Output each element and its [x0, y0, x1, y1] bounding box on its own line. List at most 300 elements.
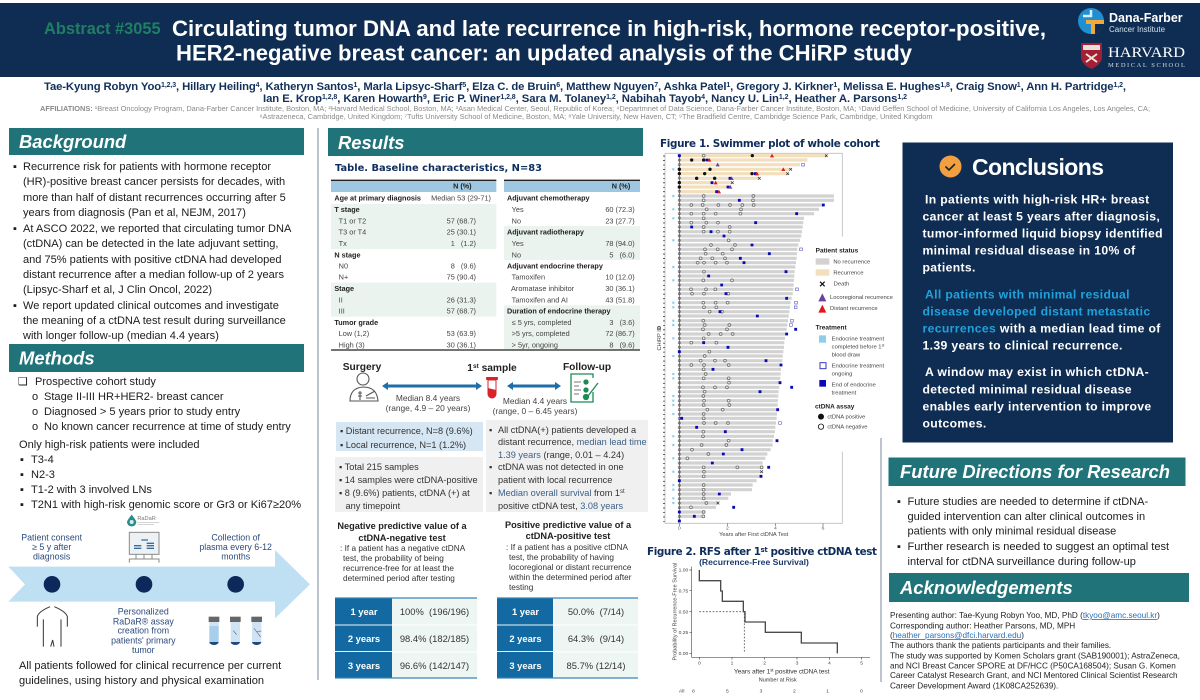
methods text: Diagnosed > 5 years prior to study entry: [44, 406, 241, 418]
heading: conclusions: Conclusions: [972, 154, 1104, 180]
logo: Dana-Farber: Cancer Institute: [1109, 25, 1166, 34]
authors: 1,2: [606, 94, 616, 101]
table: right column: 8 (9.6): [609, 340, 635, 349]
logo: Harvard Medical School: [1081, 43, 1185, 69]
future directions text: Future studies are needed to determine if ctDNA-: [908, 496, 1149, 508]
axis labels: 2: [726, 525, 729, 531]
table: positive predictive value: 64.3% (9/14): [568, 633, 624, 644]
positive predictive value text: test, the probability of having: [509, 553, 614, 562]
authors: , Melissa E. Hughes: [837, 81, 941, 93]
number at risk: [679, 678, 863, 694]
authors: 7: [654, 82, 658, 89]
callout: ctDNA outcomes: ▪: [489, 462, 492, 472]
authors: 1,2,8: [322, 94, 337, 101]
legend: st: [882, 344, 884, 348]
conclusion 1: minimal residual disease in 10% of: [922, 244, 1136, 258]
label: plasma collection: [199, 533, 272, 562]
table: left column: Stage: [334, 284, 354, 293]
interval labels: (range, 4.9 – 20 years): [386, 403, 471, 413]
methods text: N2-3: [31, 469, 55, 481]
table: left column: 75 (90.4): [447, 273, 476, 282]
legend: blood draw: [832, 352, 861, 358]
callout: sample counts: ▪ 8 (9.6%) patients, ctDNA (+) at: [339, 488, 470, 498]
background text: [13, 161, 292, 342]
axis labels: 1.00: [679, 568, 689, 574]
callout: ctDNA outcomes: distant recurrence, median lead time: [498, 437, 647, 447]
axis labels: positive ctDNA test: [773, 668, 830, 675]
authors: 1,2,8: [500, 94, 516, 101]
legend: End of endocrine: [832, 382, 876, 388]
arrow: median 8.4 years: [382, 382, 482, 390]
table: left column: Median 53 (29-71): [431, 194, 491, 203]
table: left column: Tx: [339, 239, 347, 248]
table: right column: 78 (94.0): [605, 239, 635, 248]
label: plasma collection: months: [221, 552, 251, 562]
affiliations: AFFILIATIONS: ¹Breast Oncology Program, Dana-Farber Cancer Institute, Boston, MA; ²Harvard Medical School, Boston, MA; ³Asan Medical Center, Seoul, Republic of Korea; ⁴Departmnet of Data Science, Dana-Farber Cancer Institute, Boston, MA; ⁵David Geffen School of Medicine, University of California Los Angeles, Los Angeles, CA;: [40, 104, 1150, 113]
label: patient consent: ≥ 5 y after: [32, 542, 71, 552]
callout: sample counts: any timepoint: [346, 501, 401, 511]
title: Circulating tumor DNA and late recurrence in high-risk, hormone receptor-positive,: [172, 16, 1046, 41]
conclusion 2: [922, 288, 1161, 352]
legend: ongoing: [832, 371, 852, 377]
negative predictive value text: determined period after testing: [343, 574, 455, 583]
baseline ctDNA column: [675, 156, 684, 522]
axis labels: 3: [796, 660, 799, 666]
legend: Distant recurrence: [830, 306, 878, 312]
legend: ctDNA negative: [827, 425, 868, 431]
label: patient consent: [21, 533, 83, 562]
axis labels: CHiRP ID: [657, 326, 663, 351]
future directions text: patients with only minimal residual disease: [908, 526, 1116, 538]
acknowledgements text: and NCI Breast Cancer SPORE at DF/HCC (P50CA168504); Susan G. Komen: [890, 662, 1176, 670]
icon: monitor: [129, 532, 159, 563]
future directions text: interval for ctDNA surveillance during follow-up: [908, 556, 1136, 568]
conclusion 3: detected minimal residual disease: [922, 382, 1132, 396]
table: positive predictive value: 50.0% (7/14): [568, 606, 624, 617]
table: left column: 53 (63.9): [447, 329, 476, 338]
background text: At ASCO 2022, we reported that circulating tumor DNA: [23, 223, 292, 235]
authors: , Karen Howarth: [337, 93, 423, 105]
table: left column: 8 (9.6): [451, 261, 476, 270]
icon: surgery patient: [350, 373, 378, 401]
authors: , Heather A. Parsons: [788, 93, 897, 105]
table: negative predictive value: 3 years: [348, 660, 380, 671]
axis labels: 0.00: [679, 651, 689, 657]
negative predictive value text: ctDNA-negative test: [358, 533, 446, 543]
axis labels: Years after 1: [734, 668, 770, 675]
distant recurrence markers: [707, 154, 785, 193]
callout: ctDNA outcomes: patient with local recurrence: [498, 475, 612, 485]
timeline: surgery to follow-up: Follow-up: [563, 362, 611, 373]
authors: 1,2: [779, 94, 789, 101]
heading: results: [328, 128, 643, 156]
table: left column: 57 (68.7): [447, 307, 476, 316]
future directions text: Further research is needed to suggest an optimal test: [908, 541, 1169, 553]
table: right column: Tamoxifen: [512, 273, 545, 282]
methods text: o: [32, 406, 38, 418]
label: personalized assay: tumor: [132, 645, 155, 655]
background text: ▪: [13, 161, 17, 173]
table: right column: >5 yrs, completed: [512, 329, 570, 338]
authors: 1: [354, 82, 358, 89]
callout: ctDNA outcomes: st: [620, 489, 625, 495]
conclusion 2: All patients with minimal residual: [925, 288, 1130, 302]
axis labels: Probability of Recurrence-Free Survival: [673, 563, 679, 660]
conclusion 1: In patients with high-risk HR+ breast: [925, 192, 1150, 206]
timeline: surgery to follow-up: sample: [479, 363, 517, 374]
methods text: ▪: [20, 499, 24, 511]
authors: 1,8: [940, 82, 950, 89]
table: right column: No: [512, 250, 521, 259]
conclusion 2: disease developed distant metastatic: [922, 304, 1150, 318]
positive predictive value text: [505, 520, 632, 592]
background text: years from diagnosis (Pan et al, NEJM, 2017): [23, 207, 246, 219]
background text: with longer follow-up (median 4.4 years): [22, 330, 219, 342]
axis labels: st: [770, 667, 774, 672]
background text: and 75% patients with positive ctDNA had developed: [23, 254, 282, 266]
axis labels: 4: [774, 525, 777, 531]
conclusion 3: enables early intervention to improve: [922, 400, 1152, 414]
table: right column: Aromatase inhibitor: [511, 284, 575, 293]
icon: RaDaR logo: [127, 515, 159, 526]
table: negative predictive value: 2 years: [348, 633, 380, 644]
icon: blood tube: [486, 377, 498, 398]
heading: acknowledgements: Acknowledgements: [899, 577, 1073, 598]
table: right column: Yes: [512, 205, 524, 214]
figure 2 title: (Recurrence-Free Survival): [699, 557, 809, 567]
table: left column: T stage: [334, 205, 360, 214]
methods text: Stage II-III HR+HER2- breast cancer: [44, 391, 224, 403]
authors: 4: [701, 94, 705, 101]
no-recurrence bars: [679, 196, 834, 521]
icon: patient torso: [37, 607, 67, 647]
acknowledgements text: Career Catalyst Research Grant, and NCI Mentored Clinical Scientist Research: [890, 671, 1178, 680]
number at risk: 0: [860, 688, 863, 694]
panel: conclusions: [902, 142, 1173, 442]
callout: ctDNA outcomes: [486, 420, 648, 512]
authors: 1,2,3: [161, 82, 176, 89]
table: negative predictive value: 100% (196/196): [400, 606, 469, 617]
baseline characteristics table: N (%): [453, 182, 472, 191]
background text: the meaning of a ctDNA test result during surveillance: [23, 315, 286, 327]
locoregional recurrence markers: [716, 163, 734, 189]
figure 2 title: [647, 546, 877, 567]
callout: recurrence counts: ▪ Local recurrence, N=1 (1.2%): [340, 440, 466, 450]
table: right column: 30 (36.1): [605, 284, 635, 293]
methods text: T1-2 with 3 involved LNs: [31, 484, 152, 496]
death markers: [717, 154, 828, 504]
acknowledgements text: Career Development Award (1K08CA252639).: [890, 682, 1058, 690]
negative predictive value text: recurrence-free for at least the: [343, 564, 454, 573]
legend: Death: [834, 282, 849, 288]
follow-up note: guidelines, using history and physical examination: [19, 675, 264, 687]
table: right column: 10 (12.0): [605, 273, 635, 282]
arrow: median 4.4 years: [507, 382, 561, 390]
table: left column: 30 (36.1): [447, 340, 476, 349]
background text: We report updated clinical outcomes and investigate: [23, 300, 279, 312]
legend: ctDNA assay: [815, 404, 855, 411]
table: right column: Adjuvant endocrine therapy: [507, 261, 603, 270]
logo: Dana-Farber: Dana-Farber: [1109, 11, 1183, 25]
table: left column: Age at primary diagnosis: [334, 194, 421, 203]
table: left column: 26 (31.3): [447, 295, 476, 304]
authors: 1: [833, 82, 837, 89]
panel: results: [328, 128, 648, 678]
heading: acknowledgements: [889, 573, 1189, 602]
number at risk: All: [679, 688, 684, 694]
callout: ctDNA outcomes: ctDNA was not detected in one: [498, 462, 624, 472]
figure 2 title: Figure 2. RFS after 1: [647, 546, 761, 558]
methods text: o: [32, 391, 38, 403]
number at risk: Number at Risk: [759, 678, 797, 684]
table: left column: III: [339, 307, 345, 316]
acknowledgements text: (heather_parsons@dfci.harvard.edu): [890, 631, 1024, 640]
authors: ,: [1123, 81, 1126, 93]
acknowledgements text: [890, 611, 1180, 690]
ctDNA positive markers: [679, 156, 752, 187]
table: right column: Duration of endocrine therapy: [507, 307, 611, 316]
table: left column: [334, 194, 491, 349]
acknowledgements text: The authors thank the patients participants and their families.: [890, 641, 1111, 650]
methods text: ▪: [20, 469, 24, 481]
panel: acknowledgements: [889, 573, 1189, 690]
legend: Endocrine treatment: [832, 336, 885, 342]
conclusion 2: 1.39 years to clinical recurrence.: [922, 338, 1123, 352]
axis labels: 0.25: [679, 630, 689, 636]
acknowledgements text: Presenting author: Tae-Kyung Robyn Yoo, MD, PhD (tkyoo@amc.seoul.kr): [890, 611, 1160, 620]
table: positive predictive value: [497, 598, 638, 678]
label: personalized assay: RaDaR® assay: [113, 616, 174, 626]
positive predictive value text: within the determined period after: [508, 573, 632, 582]
affiliations: [40, 104, 1150, 121]
chart: swimmer plot: [657, 153, 893, 538]
legend: Locoregional recurrence: [830, 295, 893, 301]
authors: 9: [423, 94, 427, 101]
conclusion 2: recurrences with a median lead time of: [922, 322, 1161, 336]
axis labels: 1: [731, 660, 734, 666]
axis labels: 4: [828, 660, 831, 666]
table: positive predictive value: 3 years: [509, 660, 542, 671]
label: personalized assay: [111, 607, 176, 655]
table title: Table. Baseline characteristics, N=83: [335, 163, 542, 174]
timeline: surgery to follow-up: [343, 362, 611, 416]
table: left column: N stage: [334, 250, 361, 259]
background text: (HR)-positive breast cancer persists for decades, with: [23, 176, 285, 188]
legend: completed before 1: [832, 345, 882, 351]
title: HER2-negative breast cancer: an updated analysis of the CHiRP study: [176, 40, 912, 66]
legend: Treatment: [816, 324, 847, 331]
authors: Tae-Kyung Robyn Yoo: [44, 81, 161, 93]
methods text: [18, 375, 301, 511]
authors: , Ashka Patel: [658, 81, 727, 93]
legend: [815, 247, 893, 431]
table: negative predictive value: 98.4% (182/185): [400, 633, 469, 644]
table: right column: 23 (27.7): [605, 216, 635, 225]
table: left column: N0: [339, 261, 348, 270]
authors: 1: [726, 82, 730, 89]
future directions text: ▪: [897, 496, 901, 508]
axis labels: 5: [860, 660, 863, 666]
logo: Harvard Medical School: HARVARD: [1108, 45, 1185, 61]
authors: , Craig Snow: [950, 81, 1017, 93]
axis labels: 0: [698, 660, 701, 666]
table: left column: T3 or T4: [339, 228, 366, 237]
heading: background: [9, 128, 304, 155]
table: left column: Tumor grade: [334, 318, 378, 327]
ctDNA negative markers: [659, 156, 762, 516]
icon: RaDaR logo: RaDaR: [137, 516, 156, 522]
table: negative predictive value: 1 year: [350, 606, 378, 617]
background text: distant recurrence after a median follow-up of 2 years: [23, 269, 284, 281]
follow-up note: All patients followed for clinical recurrence per current: [19, 660, 281, 672]
number at risk: 8: [692, 688, 695, 694]
background text: ▪: [13, 300, 17, 312]
background text: ▪: [13, 223, 17, 235]
acknowledgements text: Corresponding author: Heather Parsons, MD, MPH: [890, 622, 1075, 630]
background text: Recurrence risk for patients with hormone receptor: [23, 161, 271, 173]
table: right column: 3 (3.6): [609, 318, 635, 327]
header banner: [0, 3, 1200, 77]
heading: future directions: [888, 458, 1186, 486]
endocrine treatment completed markers: [670, 169, 677, 503]
number at risk: 3: [760, 688, 763, 694]
authors: [44, 81, 1126, 105]
panel: methods: [8, 344, 310, 687]
positive predictive value text: testing: [509, 583, 534, 592]
authors: , Gregory J. Kirkner: [730, 81, 834, 93]
callout: ctDNA outcomes: 1.39 years (range, 0.01 – 4.24): [498, 450, 624, 460]
table: positive predictive value: 2 years: [509, 633, 542, 644]
future directions text: guided intervention can alter clinical outcomes in: [908, 511, 1145, 523]
callout: ctDNA outcomes: ▪: [489, 425, 492, 435]
interval labels: Median 8.4 years: [396, 393, 460, 403]
heading: methods: Methods: [19, 348, 95, 368]
interval labels: Median 4.4 years: [503, 396, 567, 406]
negative predictive value text: test, the probability of being: [343, 554, 444, 563]
methods text: Only high-risk patients were included: [19, 439, 200, 451]
callout: recurrence counts: ▪ Distant recurrence, N=8 (9.6%): [340, 426, 473, 436]
affiliations: ⁶Astrazeneca, Cambridge, United Kingdom; ⁷Tufts University School of Medicine, Boston, MA; ⁸Yale University, New Haven, CT; ⁹The Bradfield Centre, Cambridge Science Park, Cambridge, United Kingdom: [260, 112, 932, 121]
background text: (Lipsyc-Sharf et al, J Clin Oncol, 2022): [23, 284, 212, 296]
future directions text: [897, 496, 1169, 568]
positive predictive value text: : If a patient has a positive ctDNA: [506, 543, 628, 552]
methods text: No known cancer recurrence at time of study entry: [44, 421, 291, 433]
icon: check badge: [940, 156, 962, 178]
table: right column: No: [512, 216, 521, 225]
table: right column: 60 (72.3): [605, 205, 635, 214]
positive predictive value text: locoregional or distant recurrence: [509, 563, 632, 572]
heading: results: Results: [338, 132, 404, 153]
median dotted guide: [699, 612, 744, 653]
table: left column: 25 (30.1): [447, 228, 476, 237]
table: negative predictive value: 96.6% (142/147): [400, 660, 469, 671]
table: right column: ≤ 5 yrs, completed: [512, 318, 571, 327]
label: patient consent: Patient consent: [21, 533, 83, 543]
authors: 1,2: [1113, 82, 1123, 89]
callout: sample counts: [335, 457, 483, 512]
table: right column: [507, 194, 635, 349]
callout: ctDNA outcomes: ▪: [489, 488, 492, 498]
table: left column: II: [339, 295, 343, 304]
authors: , Matthew Nguyen: [560, 81, 654, 93]
authors: , Elza C. de Bruin: [466, 81, 556, 93]
study timeline arrow: [8, 515, 310, 655]
negative predictive value text: [337, 521, 467, 583]
authors: 1,2: [897, 94, 907, 101]
conclusion 1: tumor-informed liquid biopsy identified: [922, 226, 1163, 240]
abstract number: Abstract #3055: [44, 20, 161, 38]
table: right column: > 5yr, ongoing: [512, 340, 558, 349]
authors: , Sara M. Tolaney: [516, 93, 607, 105]
acknowledgements text: The study was supported by Komen Scholars grant (SAB190001); AstraZeneca,: [890, 652, 1180, 660]
methods text: ▪: [20, 484, 24, 496]
number at risk: 2: [793, 688, 796, 694]
axis labels: 0.50: [679, 609, 689, 615]
axis labels: 0: [678, 525, 681, 531]
table: left column: 1 (1.2): [451, 239, 476, 248]
axis labels: 2: [763, 660, 766, 666]
table: left column: N+: [339, 273, 348, 282]
axis labels: [657, 326, 825, 538]
end of endocrine treatment markers: [679, 156, 823, 521]
legend: Endocrine treatment: [832, 363, 885, 369]
icon: blood tubes: [209, 617, 262, 645]
title: [172, 16, 1046, 66]
authors: Ian E. Krop: [263, 93, 322, 105]
table: positive predictive value: 85.7% (12/14): [567, 660, 625, 671]
timeline: surgery to follow-up: 1: [467, 363, 473, 374]
legend: Patient status: [816, 247, 859, 254]
authors: 1: [1017, 82, 1021, 89]
callout: ctDNA outcomes: Median overall survival from 1: [498, 488, 620, 498]
axis labels: 0.75: [679, 588, 689, 594]
table: right column: Tamoxifen and AI: [512, 295, 568, 304]
heading: methods: [9, 344, 304, 372]
authors: 6: [556, 82, 560, 89]
authors: , Nancy U. Lin: [705, 93, 779, 105]
legend: ctDNA positive: [827, 415, 865, 421]
icon: clipboard: [571, 374, 598, 402]
methods text: T2N1 with high-risk genomic score or Gr3 or Ki67≥20%: [31, 499, 301, 511]
conclusion 3: A window may exist in which ctDNA-: [925, 365, 1149, 379]
authors: 5: [462, 82, 466, 89]
endocrine treatment ongoing markers: [780, 165, 803, 423]
column separators: [318, 128, 881, 682]
conclusion 3: [922, 365, 1152, 430]
figure 1 title: Figure 1. Swimmer plot of whole cohort: [660, 138, 880, 150]
callout: recurrence counts: [336, 422, 483, 451]
future directions text: ▪: [897, 541, 901, 553]
table: right column: 43 (51.8): [605, 295, 635, 304]
table: right column: Adjuvant chemotherapy: [507, 194, 590, 203]
heading: future directions: Future Directions for Research: [900, 461, 1170, 482]
positive predictive value text: ctDNA-positive test: [526, 531, 610, 541]
heading: background: Background: [19, 131, 127, 152]
table: positive predictive value: 1 year: [512, 606, 539, 617]
authors: , Ann H. Partridge: [1021, 81, 1114, 93]
authors: 4: [256, 82, 260, 89]
chart: recurrence-free survival: [673, 563, 870, 694]
label: patient consent: diagnosis: [33, 552, 71, 562]
table: left column: High (3): [339, 340, 365, 349]
number at risk: 5: [726, 688, 729, 694]
conclusion 1: cancer at least 5 years after diagnosis,: [922, 210, 1160, 224]
table: right column: Adjuvant radiotherapy: [507, 228, 584, 237]
methods text: ▪: [20, 454, 24, 466]
methods text: Prospective cohort study: [35, 376, 156, 388]
figure 2 title: st: [761, 546, 768, 554]
interval labels: [386, 393, 578, 416]
